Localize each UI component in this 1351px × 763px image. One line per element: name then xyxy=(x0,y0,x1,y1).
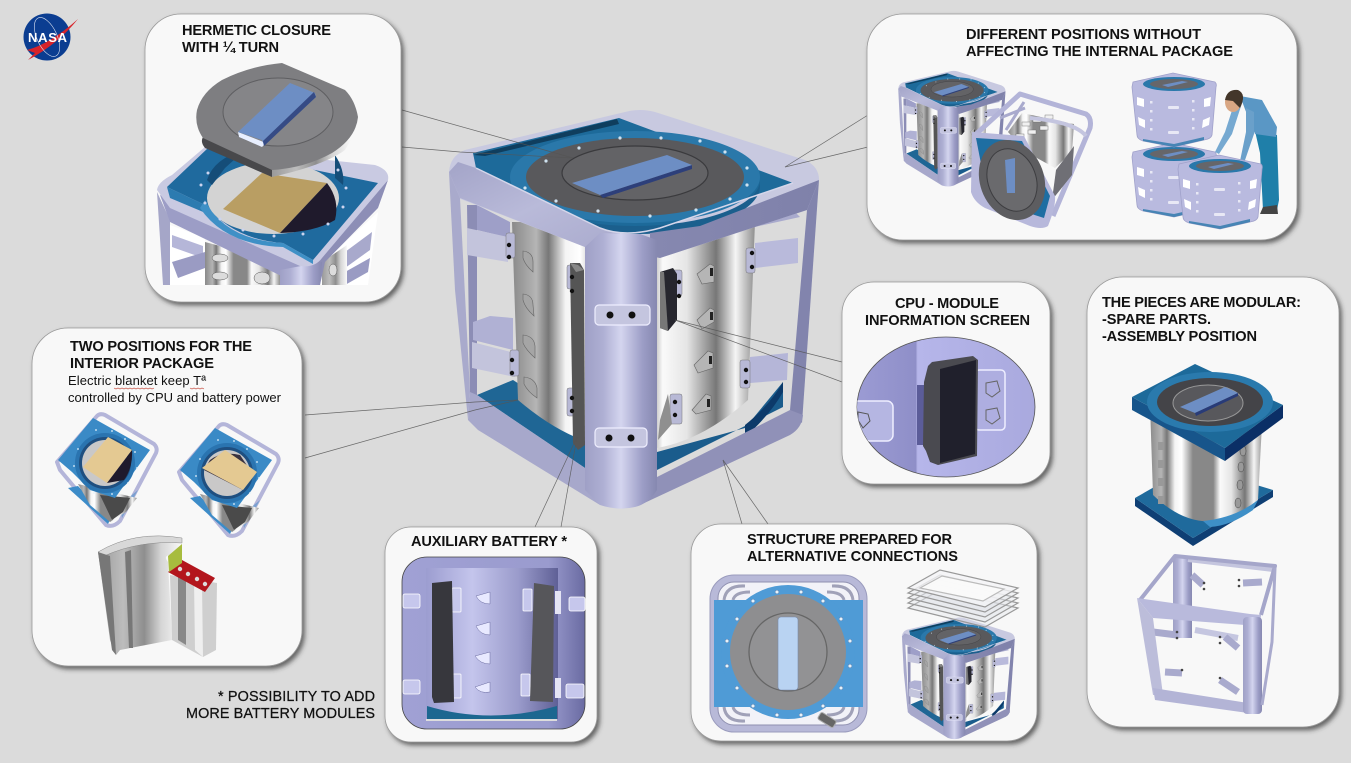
illustration: top view xyxy=(710,575,867,732)
illustration: person leaning over cube xyxy=(1215,90,1279,214)
text: electric blanket note: controlled by CPU and battery power xyxy=(68,390,282,405)
heading: alternative connections: STRUCTURE PREPARED FOR xyxy=(747,532,952,548)
illustration: outer frame xyxy=(1137,556,1275,714)
heading: auxiliary battery: AUXILIARY BATTERY * xyxy=(411,534,567,550)
heading: modular pieces: -SPARE PARTS. xyxy=(1102,312,1211,328)
illustration: information screen xyxy=(850,337,1035,477)
heading: different positions: DIFFERENT POSITIONS WITHOUT xyxy=(966,27,1201,43)
leader lines xyxy=(305,110,868,527)
panel: different positions xyxy=(867,14,1297,240)
footnote: battery modules: MORE BATTERY MODULES xyxy=(186,706,375,722)
illustration: tilted cube xyxy=(968,94,1090,229)
heading: CPU module: INFORMATION SCREEN xyxy=(865,313,1030,329)
panel: two positions xyxy=(32,328,302,666)
panel: CPU module xyxy=(842,282,1050,484)
heading: hermetic closure: WITH ¼ TURN xyxy=(182,40,279,56)
text: electric blanket note: Electric blanket keep Tª xyxy=(68,373,206,388)
NASA logo: NASA xyxy=(28,30,68,45)
panel: auxiliary battery xyxy=(385,527,597,742)
heading: modular pieces: THE PIECES ARE MODULAR: xyxy=(1102,295,1301,311)
NASA logo xyxy=(24,14,78,60)
illustration: upright cube xyxy=(898,71,1006,186)
panel: modular pieces xyxy=(1087,277,1339,727)
panel: hermetic closure xyxy=(145,14,401,302)
illustration: cube with stacked frames xyxy=(902,570,1018,739)
illustration: front cube xyxy=(1178,155,1262,229)
illustration: internal package xyxy=(1132,364,1283,546)
spell-check squiggle xyxy=(114,388,204,389)
illustration: interior package section xyxy=(98,536,217,657)
heading: modular pieces: -ASSEMBLY POSITION xyxy=(1102,329,1257,345)
heading: two positions: INTERIOR PACKAGE xyxy=(70,356,214,372)
heading: hermetic closure: HERMETIC CLOSURE xyxy=(182,23,331,39)
illustration: package position two xyxy=(179,424,279,536)
panel: alternative connections xyxy=(691,524,1037,741)
heading: different positions: AFFECTING THE INTERNAL PACKAGE xyxy=(966,44,1233,60)
illustration: stacked cubes xyxy=(1132,73,1216,217)
heading: CPU module: CPU - MODULE xyxy=(895,296,999,312)
heading: two positions: TWO POSITIONS FOR THE xyxy=(70,339,252,355)
illustration: battery modules xyxy=(402,557,585,729)
footnote: battery modules: * POSSIBILITY TO ADD xyxy=(218,689,375,705)
illustration: package position one xyxy=(57,414,157,526)
illustration: open lid over cube xyxy=(157,63,388,285)
heading: alternative connections: ALTERNATIVE CONNECTIONS xyxy=(747,549,958,565)
central cube xyxy=(449,110,819,509)
